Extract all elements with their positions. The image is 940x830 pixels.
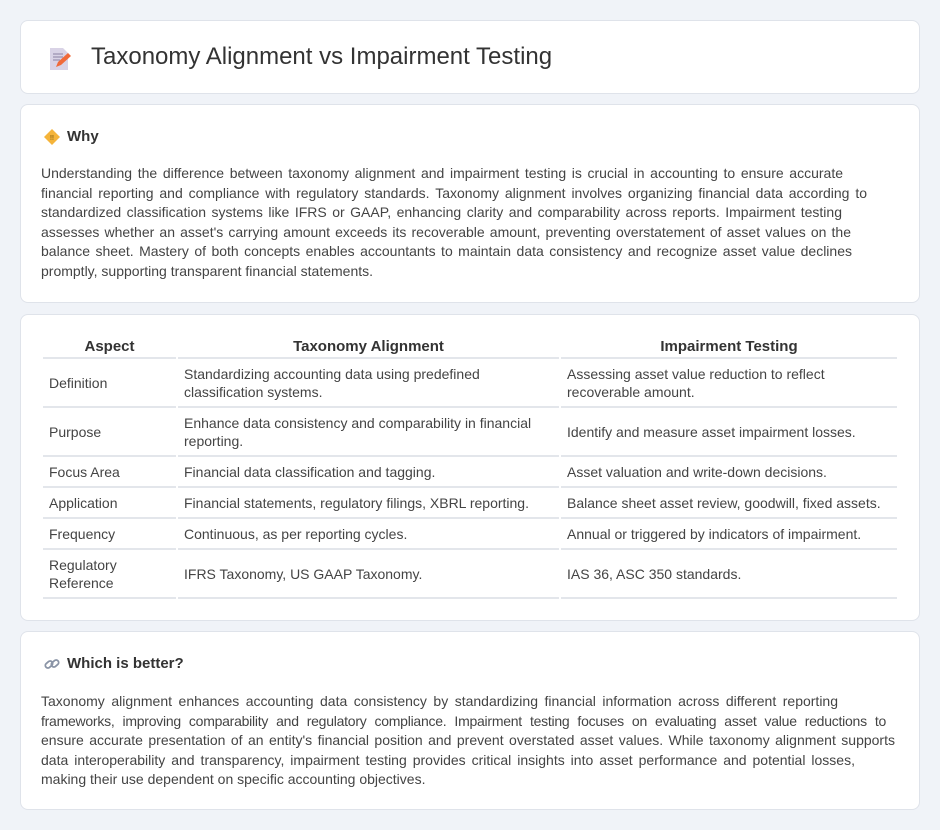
table: Application [49,494,118,510]
heading: title: Taxonomy Alignment vs Impairment Testing [91,43,552,70]
table: Regulatory Reference [49,556,117,590]
icon: why diamond [44,129,60,145]
icon: document pencil [50,48,71,70]
table: Annual or triggered by indicators of impairment. [567,526,861,542]
text: which is better: frameworks, improving comparability and regulatory compliance. Impairment testing focuses on evaluating asset value reductions to [41,712,886,728]
panel: comparison table [20,314,920,621]
text: why: standardized classification systems like IFRS or GAAP, enhancing clarity and comparability across reports. Impairment testing [41,204,842,220]
table: Financial data classification and tagging. [184,464,435,480]
heading: which is better: Which is better? [67,655,184,672]
panel: why [20,104,920,303]
text: why: financial reporting and compliance with regulatory standards. Taxonomy alignment involves organizing financial data according to [41,184,867,200]
icon: link [44,659,60,669]
heading: why: Why [67,128,99,145]
text: why: Understanding the difference between taxonomy alignment and impairment testing is crucial in accounting to ensure accurate [41,165,843,181]
text: why [41,165,867,279]
table: Financial statements, regulatory filings, XBRL reporting. [184,494,529,510]
table: Standardizing accounting data using predefined classification systems. [184,366,480,400]
table: Continuous, as per reporting cycles. [184,526,407,542]
text: which is better: ensure accurate presentation of an entity's financial position and prevent overstated asset values. While taxonomy alignment supports [41,732,895,748]
table: Purpose [49,424,101,440]
table: Focus Area [49,464,120,480]
table: IAS 36, ASC 350 standards. [567,566,741,582]
text: why: promptly, supporting transparent financial statements. [41,262,373,278]
table: Assessing asset value reduction to reflect recoverable amount. [567,366,825,400]
table: Taxonomy Alignment [293,338,444,355]
table: Enhance data consistency and comparability in financial reporting. [184,414,531,448]
text: which is better [41,693,895,787]
text: which is better: making their use dependent on specific accounting objectives. [41,771,425,787]
text: which is better: Taxonomy alignment enhances accounting data consistency by standardizing financial information across different reporting [41,693,838,709]
table: Aspect [84,338,135,355]
icon: why diamond: !! [50,135,54,142]
table: Balance sheet asset review, goodwill, fixed assets. [567,494,881,510]
table: Frequency [49,526,115,542]
panel: title [20,20,920,94]
table: Asset valuation and write-down decisions. [567,464,827,480]
table: Identify and measure asset impairment losses. [567,424,856,440]
text: why: assesses whether an asset's carrying amount exceeds its recoverable amount, preventing overstatement of asset values on the [41,224,851,240]
text: which is better: data interoperability and transparency, impairment testing provides critical insights into asset performance and potential losses, [41,752,855,768]
panel: which is better [20,631,920,810]
table: Impairment Testing [660,338,798,355]
table: IFRS Taxonomy, US GAAP Taxonomy. [184,566,422,582]
table [43,338,897,599]
table: Definition [49,374,107,390]
text: why: balance sheet. Mastery of both concepts enables accountants to maintain data consistency and recognize asset value declines [41,243,852,259]
